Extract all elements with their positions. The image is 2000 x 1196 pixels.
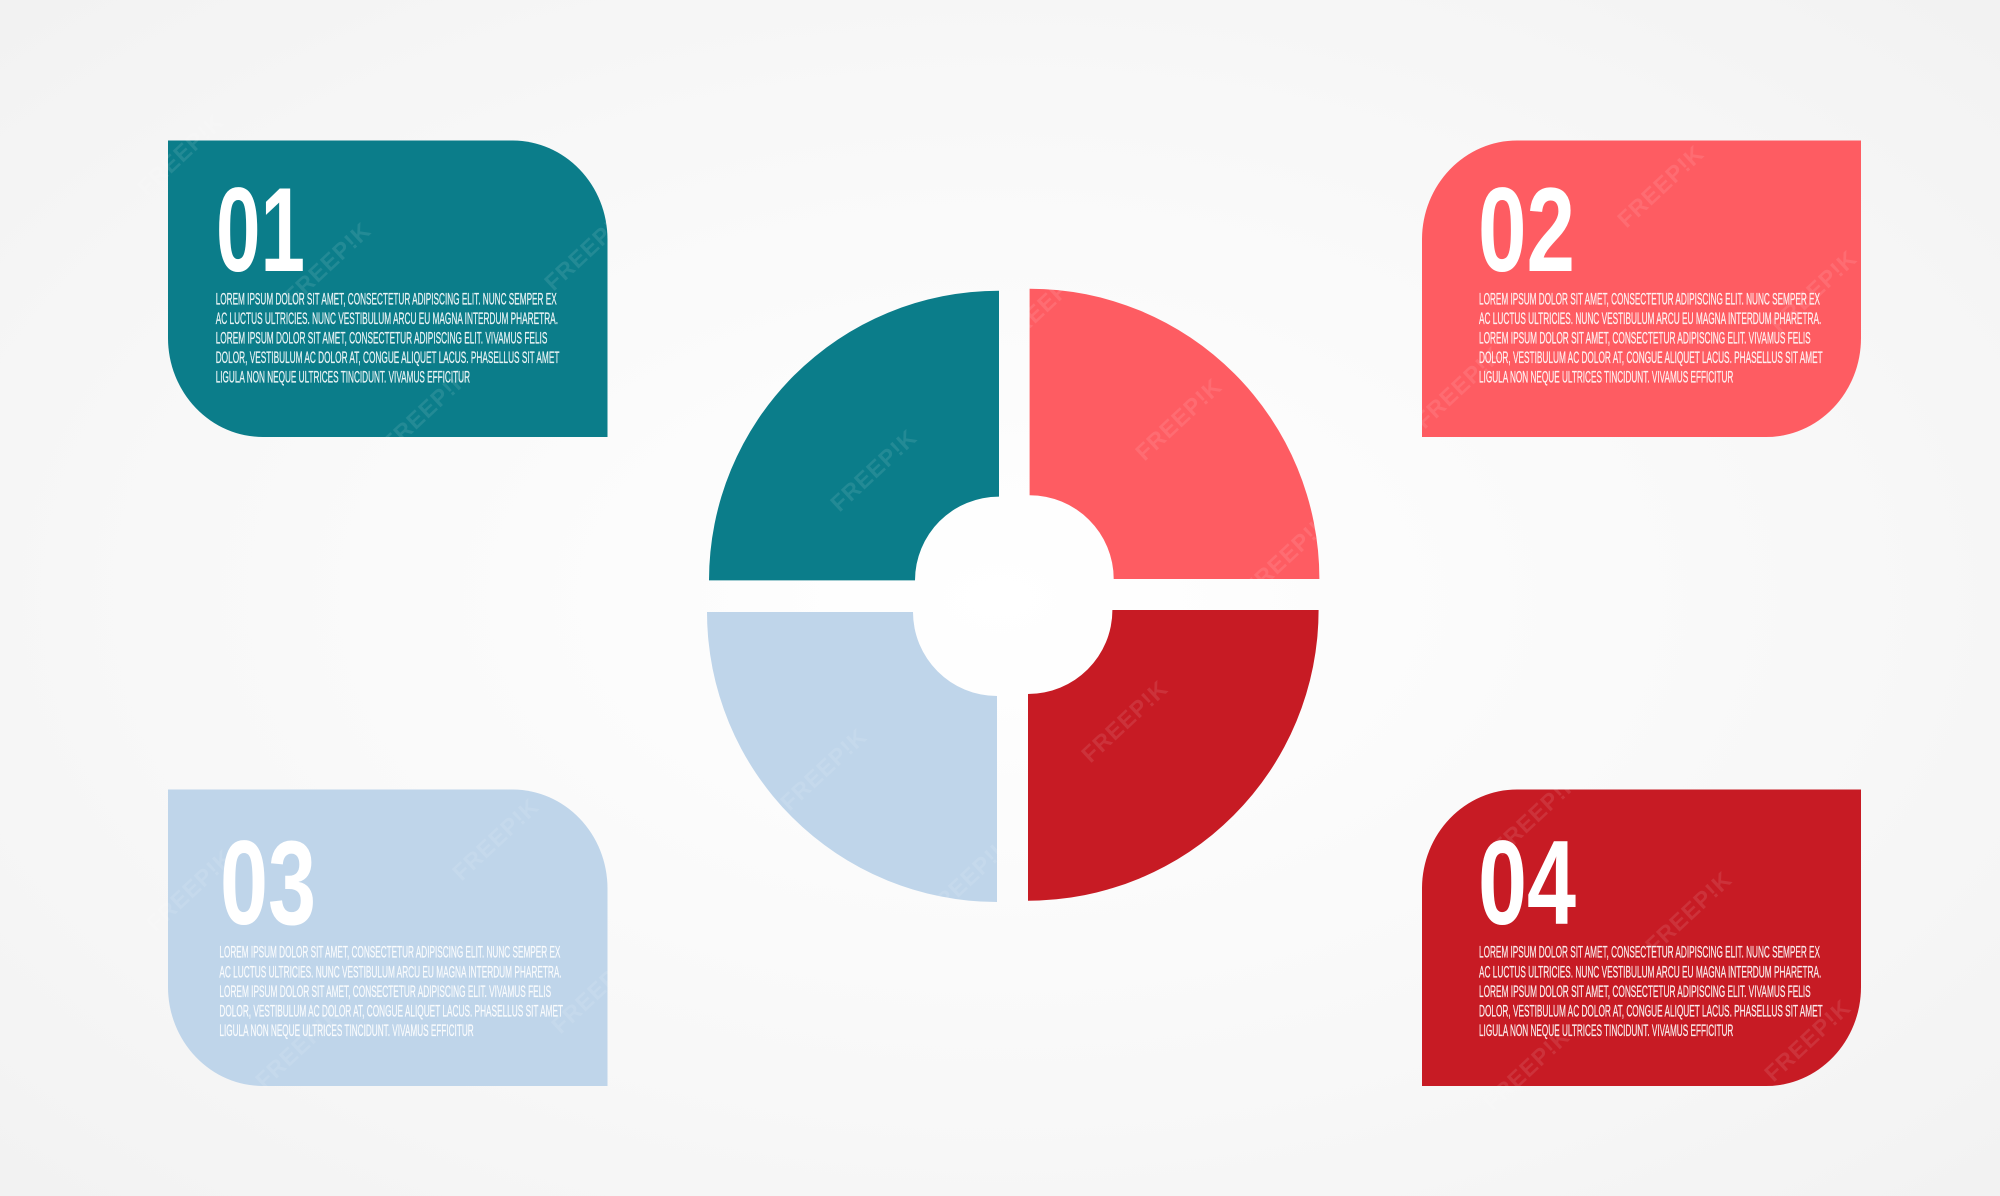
segment 03 light blue xyxy=(707,612,997,902)
text block 04 xyxy=(1479,944,1823,1040)
panel shape 02 xyxy=(1422,140,1861,437)
panel shape 04 xyxy=(1422,790,1861,1086)
watermarks: FREEP!K xyxy=(1759,994,1856,1086)
watermarks: FREEP!K xyxy=(250,1001,347,1093)
panel: step 02 xyxy=(1422,140,1861,437)
text block 01: LOREM IPSUM DOLOR SIT AMET, CONSECTETUR ADIPISCING ELIT. NUNC SEMPER EX xyxy=(216,290,557,308)
text block 03: DOLOR, VESTIBULUM AC DOLOR AT, CONGUE ALIQUET LACUS. PHASELLUS SIT AMET xyxy=(219,1002,563,1020)
number 02: 02 xyxy=(1478,163,1575,297)
text block 03: AC LUCTUS ULTRICIES. NUNC VESTIBULUM ARCU EU MAGNA INTERDUM PHARETRA. xyxy=(219,963,562,981)
text block 03: LOREM IPSUM DOLOR SIT AMET, CONSECTETUR ADIPISCING ELIT. NUNC SEMPER EX xyxy=(219,944,560,962)
number 01: 01 xyxy=(216,163,305,297)
watermarks: FREEP!K xyxy=(279,217,376,309)
text block 02: LIGULA NON NEQUE ULTRICES TINCIDUNT. VIVAMUS EFFICITUR xyxy=(1479,369,1733,387)
number 03: 03 xyxy=(220,816,316,950)
watermarks: FREEP!K xyxy=(546,946,643,1038)
panel shape 01 xyxy=(168,140,608,437)
text block 03: LIGULA NON NEQUE ULTRICES TINCIDUNT. VIVAMUS EFFICITUR xyxy=(219,1022,474,1040)
watermarks: FREEP!K xyxy=(132,108,229,200)
panel: step 01 xyxy=(168,140,608,437)
segment 04 red xyxy=(1028,610,1319,901)
watermarks: FREEP!K xyxy=(141,844,238,936)
watermarks xyxy=(132,108,1862,1115)
segment 01 teal xyxy=(709,291,999,580)
text block 01: AC LUCTUS ULTRICIES. NUNC VESTIBULUM ARCU EU MAGNA INTERDUM PHARETRA. xyxy=(216,310,558,328)
watermarks: FREEP!K xyxy=(1410,341,1507,433)
watermarks: FREEP!K xyxy=(1487,768,1584,860)
text block 03 xyxy=(219,944,563,1040)
watermarks: FREEP!K xyxy=(1640,866,1737,958)
watermarks: FREEP!K xyxy=(377,364,474,456)
text block 04: LIGULA NON NEQUE ULTRICES TINCIDUNT. VIVAMUS EFFICITUR xyxy=(1479,1022,1733,1040)
watermarks: FREEP!K xyxy=(447,793,544,885)
text block 01: LIGULA NON NEQUE ULTRICES TINCIDUNT. VIVAMUS EFFICITUR xyxy=(216,369,470,387)
text block 03: LOREM IPSUM DOLOR SIT AMET, CONSECTETUR ADIPISCING ELIT. VIVAMUS FELIS xyxy=(219,983,551,1001)
text block 01 xyxy=(216,290,559,387)
text block 02 xyxy=(1479,290,1823,387)
panel shape 03 xyxy=(168,790,608,1086)
number 04: 04 xyxy=(1478,816,1576,950)
watermarks: FREEP!K xyxy=(825,424,922,516)
watermarks: FREEP!K xyxy=(1765,245,1862,337)
panel: step 03 xyxy=(168,790,608,1086)
watermarks: FREEP!K xyxy=(775,723,872,815)
watermarks: FREEP!K xyxy=(1478,1023,1575,1115)
watermarks: FREEP!K xyxy=(996,258,1093,350)
text block 01: DOLOR, VESTIBULUM AC DOLOR AT, CONGUE ALIQUET LACUS. PHASELLUS SIT AMET xyxy=(216,349,559,367)
panel: step 04 xyxy=(1422,790,1861,1086)
segment 02 coral xyxy=(1030,289,1319,579)
watermarks: FREEP!K xyxy=(919,832,1016,924)
text block 01: LOREM IPSUM DOLOR SIT AMET, CONSECTETUR ADIPISCING ELIT. VIVAMUS FELIS xyxy=(216,330,547,348)
watermarks: FREEP!K xyxy=(1238,509,1335,601)
watermarks: FREEP!K xyxy=(539,203,636,295)
watermarks: FREEP!K xyxy=(1612,140,1709,232)
watermarks: FREEP!K xyxy=(1130,373,1227,465)
watermarks: FREEP!K xyxy=(1076,675,1173,767)
chart: central four-segment ring xyxy=(707,289,1319,902)
